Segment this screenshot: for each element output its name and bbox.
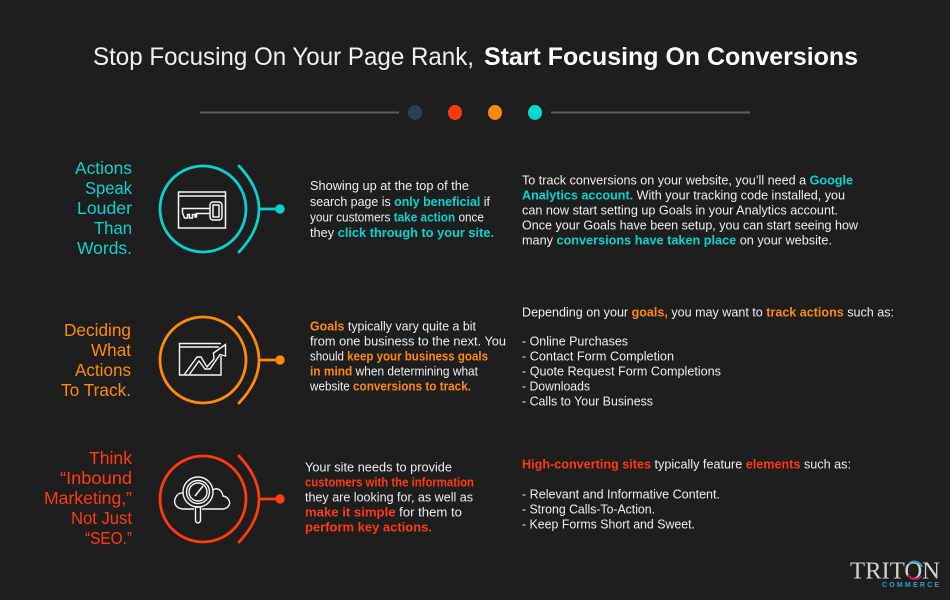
- text block: showing up: they click through to your site.: [310, 226, 494, 240]
- heading: actions speak louder: Actions: [75, 158, 132, 178]
- text block: goals vary: should keep your business goals: [310, 350, 488, 364]
- heading: actions speak louder: Than: [94, 218, 132, 238]
- text block: high-converting list: - Strong Calls-To-Action.: [522, 502, 655, 516]
- text block: track conversions: Once your Goals have been setup, you can start seeing how: [522, 218, 859, 232]
- text block: actions list: - Calls to Your Business: [522, 394, 653, 408]
- text block: goals vary: from one business to the next. You: [310, 334, 506, 348]
- heading: think inbound marketing: “SEO.”: [85, 528, 132, 548]
- title: Stop Focusing On Your Page Rank,: [93, 43, 474, 71]
- text block: actions list: - Online Purchases: [522, 334, 628, 348]
- text block: track conversions: can now start setting up Goals in your Analytics account.: [522, 204, 838, 218]
- heading: actions speak louder: Words.: [77, 238, 132, 258]
- heading: deciding what actions: What: [91, 340, 131, 360]
- divider with four coloured dots: [200, 105, 750, 120]
- text block: site needs: make it simple for them to: [305, 506, 462, 520]
- title: [93, 43, 858, 71]
- text block: site needs: they are looking for, as well as: [305, 490, 473, 504]
- text block: showing up: your customers take action once: [310, 210, 484, 224]
- text block: showing up: Showing up at the top of the: [310, 179, 469, 193]
- text block: high-converting list: High-converting sites typically feature elements such as:: [522, 458, 851, 472]
- logo: Triton Commerce: TRITON: [850, 558, 940, 584]
- text block: goals vary: [309, 320, 506, 394]
- text block: goals vary: Goals typically vary quite a bit: [310, 320, 477, 334]
- heading: think inbound marketing: [44, 448, 132, 548]
- text block: site needs: perform key actions.: [305, 520, 432, 534]
- heading: deciding what actions: To Track.: [61, 380, 131, 400]
- icon: teal ring with browser key: [160, 166, 285, 252]
- icon: orange ring with browser chart: [160, 317, 285, 403]
- text block: track conversions: Analytics account. With your tracking code installed, you: [522, 188, 845, 202]
- heading: think inbound marketing: Not Just: [71, 508, 132, 528]
- text block: showing up: [310, 179, 494, 240]
- heading: actions speak louder: Louder: [77, 198, 132, 218]
- text block: goals vary: in mind when determining what: [310, 364, 478, 378]
- title: Start Focusing On Conversions: [484, 43, 858, 71]
- text block: showing up: search page is only beneficial if: [310, 195, 491, 209]
- heading: actions speak louder: [75, 158, 132, 258]
- text block: site needs: customers with the information: [305, 476, 474, 490]
- text block: high-converting list: [522, 458, 851, 532]
- text block: actions list: [522, 306, 894, 408]
- heading: deciding what actions: [61, 320, 131, 400]
- text block: high-converting list: - Relevant and Informative Content.: [522, 488, 720, 502]
- text block: track conversions: To track conversions on your website, you’ll need a Google: [522, 174, 853, 188]
- text block: goals vary: website conversions to track.: [309, 380, 471, 394]
- icon: red ring with cloud magnifier: [160, 456, 285, 542]
- heading: deciding what actions: Deciding: [64, 320, 131, 340]
- text block: site needs: [305, 460, 474, 534]
- text block: track conversions: many conversions have taken place on your website.: [522, 234, 832, 248]
- text block: actions list: Depending on your goals, you may want to track actions such as:: [522, 306, 894, 320]
- text block: actions list: - Downloads: [522, 380, 590, 394]
- heading: deciding what actions: Actions: [75, 360, 131, 380]
- heading: think inbound marketing: “Inbound: [60, 468, 132, 488]
- text block: track conversions: [522, 174, 859, 248]
- text block: site needs: Your site needs to provide: [305, 460, 452, 474]
- text block: high-converting list: - Keep Forms Short and Sweet.: [522, 518, 695, 532]
- heading: think inbound marketing: Think: [89, 448, 132, 468]
- logo: Triton Commerce: COMMERCE: [882, 582, 939, 589]
- heading: think inbound marketing: Marketing,”: [44, 488, 132, 508]
- text block: actions list: - Contact Form Completion: [522, 350, 674, 364]
- text block: actions list: - Quote Request Form Completions: [522, 364, 721, 378]
- heading: actions speak louder: Speak: [85, 178, 132, 198]
